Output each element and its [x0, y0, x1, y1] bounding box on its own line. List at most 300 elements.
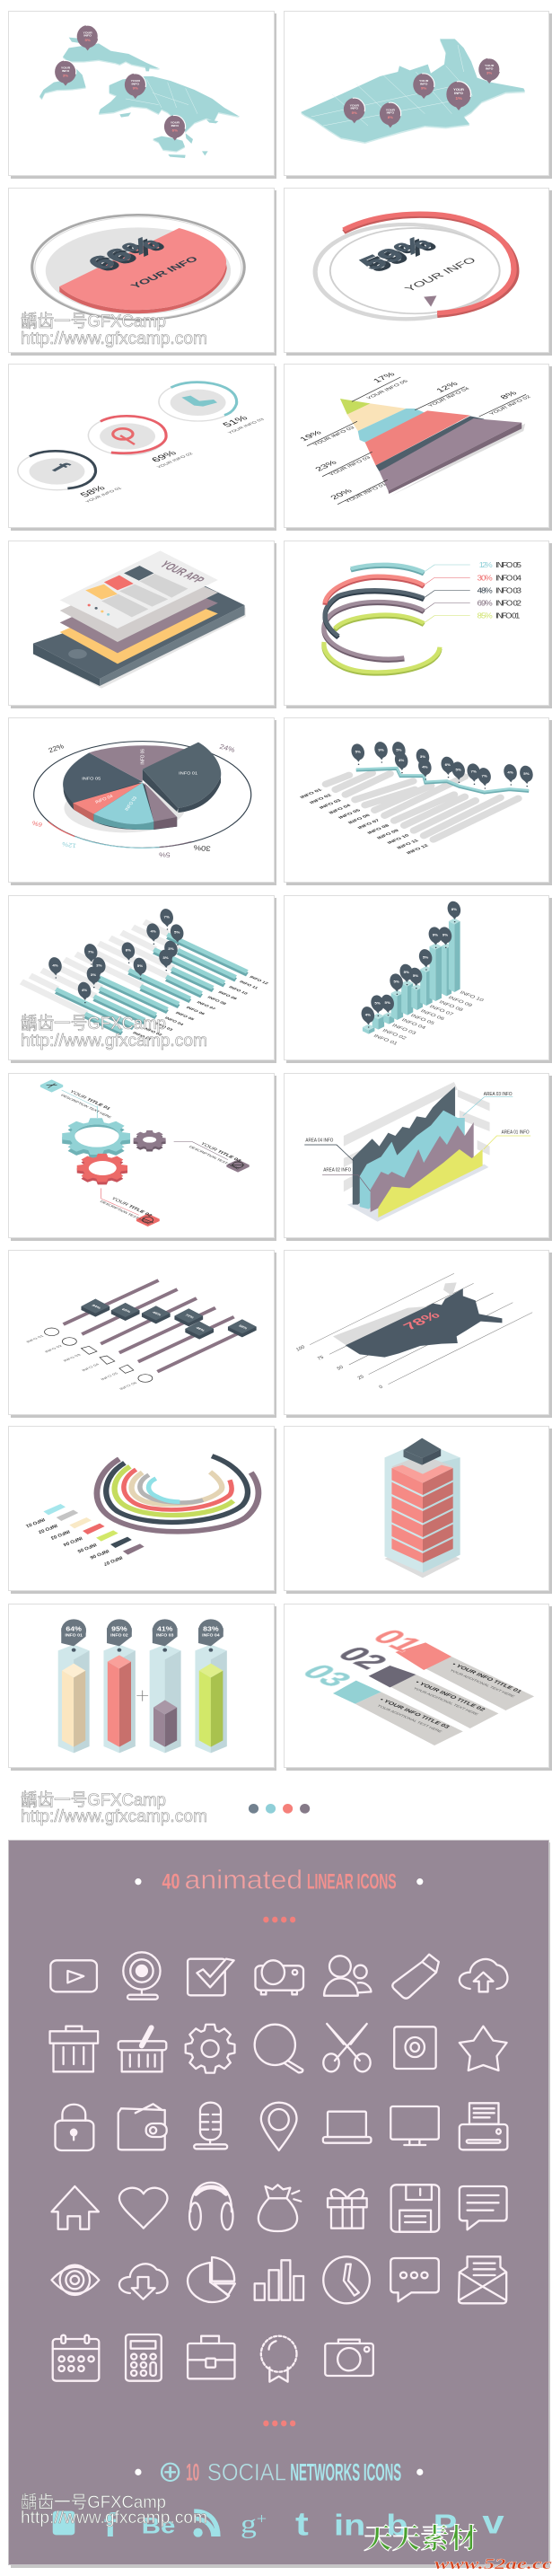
- facebook ring: [18, 451, 123, 504]
- ring legend: INFO 01: [25, 1517, 46, 1528]
- ring legend: INFO 06: [89, 1548, 110, 1560]
- panel: stacked arcs: [284, 541, 552, 708]
- slider knobs: [81, 1299, 257, 1340]
- watermark 4: 龋齿一号GFXCamp: [21, 2492, 166, 2512]
- scale labels: 100: [295, 1345, 306, 1353]
- panel: stacked arcs: INFO 05: [495, 561, 521, 569]
- world map land: [39, 38, 240, 158]
- panel: pyramid: 8%: [499, 390, 519, 400]
- heading: 40 animated linear icons: LINEAR ICONS: [307, 1869, 397, 1894]
- info labels: INFO 03: [153, 1022, 174, 1032]
- panel: 66 percent disc: [9, 189, 276, 356]
- tube 1: [58, 1619, 90, 1753]
- map fill: [346, 1288, 502, 1358]
- panel: pyramid: [284, 365, 552, 531]
- tube 3: INFO 03: [156, 1633, 174, 1638]
- tube 1: INFO 01: [65, 1633, 83, 1638]
- info labels: INFO 07: [357, 819, 381, 830]
- watermark 3: http://www.gfxcamp.com: [21, 1807, 207, 1826]
- panel: numbered strips: [284, 1604, 552, 1771]
- map pins: 6%: [172, 128, 178, 132]
- facebook ring: f: [45, 459, 75, 475]
- lime arc: [324, 615, 440, 674]
- value pins: 5%: [374, 1001, 381, 1006]
- panel: gears: DESCRIPTION TEXT HERE: [60, 1094, 113, 1119]
- panel: stacked area chart: [284, 1074, 552, 1241]
- info labels: INFO 03: [319, 799, 343, 810]
- twitter ring: YOUR INFO 03: [227, 418, 266, 435]
- value pins: 4%: [365, 1013, 371, 1016]
- watermark 1: http://www.gfxcamp.com: [21, 329, 207, 348]
- scale lines: [310, 1273, 532, 1385]
- watermark 2: [21, 1014, 207, 1051]
- panel: line over grey bars: [284, 718, 552, 885]
- map pins: INFO: [171, 124, 180, 127]
- tube 4: INFO 04: [202, 1633, 220, 1638]
- map pins: 5%: [84, 38, 91, 42]
- twitter ring: [159, 382, 266, 435]
- heading: 10 social networks icons: SOCIAL: [207, 2459, 286, 2486]
- panel: gears: YOUR TITLE 01: [68, 1090, 111, 1111]
- map pins: [344, 58, 500, 127]
- strip 03: • YOUR INFO TITLE 03: [378, 1698, 451, 1729]
- teal line: [356, 769, 529, 793]
- value pins: 3%: [91, 972, 97, 977]
- strip 01: [364, 1625, 534, 1710]
- panel: stacked arcs: 85%: [478, 611, 493, 620]
- watermark 4: http://www.gfxcamp.com: [21, 2508, 207, 2528]
- battery cap: [404, 1438, 441, 1465]
- value 59%: 59%: [358, 234, 443, 276]
- pie labels: 22%: [48, 743, 66, 754]
- columns: [363, 919, 460, 1034]
- tube 4: [195, 1619, 227, 1753]
- social icons: [53, 2504, 504, 2544]
- USA map land: [301, 39, 525, 144]
- panel: stacked arcs: 48%: [478, 586, 493, 594]
- scale labels: [295, 1345, 384, 1390]
- social icons: v: [482, 2504, 504, 2541]
- teal bars shadow: [56, 937, 247, 1033]
- outer ring: [34, 742, 251, 848]
- heading: 10 social networks icons: 10: [186, 2459, 199, 2486]
- scale labels: 25: [357, 1375, 365, 1381]
- info labels: INFO 05: [409, 1014, 436, 1026]
- value pins: 3%: [162, 955, 169, 960]
- info labels: INFO 02: [381, 1028, 407, 1041]
- teal bars: [56, 935, 247, 1031]
- slider icons: [45, 1328, 153, 1382]
- pie labels: [31, 743, 236, 858]
- label your info: YOUR INFO: [402, 256, 478, 293]
- info labels: INFO 08: [438, 1000, 464, 1013]
- info labels: INFO 06: [419, 1009, 446, 1022]
- panel: stacked area chart: AREA 04 INFO: [305, 1138, 333, 1143]
- map pins: 3%: [486, 71, 493, 75]
- tube 2: [103, 1619, 136, 1753]
- info labels: INFO 06: [347, 813, 372, 825]
- heading: 40 animated linear icons: animated: [185, 1864, 302, 1895]
- pie labels: 30%: [193, 843, 211, 853]
- value pins: 5%: [137, 963, 144, 968]
- pie labels: 12%: [61, 840, 77, 849]
- social icons: g: [241, 2510, 257, 2539]
- tube 1: 64%: [66, 1625, 82, 1632]
- triangle marker: [424, 295, 436, 307]
- pie slices: [63, 743, 221, 830]
- ring legend: INFO 05: [76, 1542, 97, 1553]
- info labels: INFO 04: [329, 804, 353, 815]
- map pins: INFO: [420, 83, 428, 85]
- watermark 1: 龋齿一号GFXCamp: [21, 312, 166, 331]
- ring legend: INFO 03: [49, 1528, 70, 1540]
- red gear: [77, 1154, 127, 1184]
- map pins: 1%: [455, 96, 462, 101]
- value pins: 7%: [164, 915, 170, 919]
- social icons: in: [334, 2508, 365, 2542]
- panel: stacked arcs: 69%: [478, 599, 493, 607]
- app screen blocks: [85, 566, 188, 617]
- pie labels: INFO 05: [82, 777, 101, 781]
- map pins: INFO: [62, 69, 70, 73]
- scale labels: 50: [337, 1365, 345, 1372]
- map pins: INFO: [486, 67, 494, 70]
- panel: stacked arcs: INFO 01: [495, 611, 520, 620]
- strip 03: [294, 1660, 463, 1745]
- info labels: INFO 09: [376, 829, 400, 840]
- ring legend: INFO 04: [61, 1535, 83, 1547]
- social icons: Be: [142, 2513, 175, 2538]
- pie labels: INFO 06: [140, 749, 146, 765]
- value pins: 3%: [168, 946, 174, 951]
- pie labels: 6%: [31, 819, 43, 829]
- value pins: 5%: [413, 973, 419, 978]
- panel: stacked arcs: 30%: [478, 574, 493, 582]
- social icons: P: [434, 2508, 457, 2542]
- slider labels: INFO 02: [44, 1344, 64, 1353]
- separator dots: [263, 2421, 295, 2426]
- slider knobs: 84%: [91, 1304, 102, 1309]
- map pins: INFO: [351, 107, 359, 110]
- map pins: YOUR: [485, 64, 495, 67]
- slider tracks: [64, 1280, 253, 1372]
- value pins: 5%: [455, 768, 461, 772]
- watermark 4: [21, 2492, 207, 2528]
- strip 03: YOUR ADDITIONAL TEXT HERE: [376, 1704, 443, 1733]
- value pins: 5%: [396, 748, 402, 752]
- pyramid labels: [307, 377, 526, 505]
- ring legend: INFO 02: [37, 1523, 58, 1534]
- pie labels: INFO 01: [179, 771, 197, 776]
- info labels: INFO 08: [206, 996, 227, 1006]
- tube 3: 41%: [157, 1625, 172, 1632]
- strip 02: 02: [329, 1642, 397, 1674]
- dark arc: [325, 590, 424, 637]
- info labels: INFO 07: [428, 1005, 455, 1017]
- value 59%: 59%: [354, 233, 439, 274]
- value pins: 4%: [52, 963, 58, 967]
- panel: USA map: [284, 11, 552, 179]
- info labels: INFO 10: [227, 986, 249, 996]
- teal arc: [351, 565, 424, 574]
- value pins: 4%: [82, 988, 88, 992]
- slider knobs: 72%: [184, 1314, 196, 1319]
- value pins: 9%: [433, 933, 438, 937]
- pinterest ring: YOUR INFO 02: [156, 453, 195, 470]
- map pins: YOUR: [350, 104, 360, 107]
- info labels: INFO 10: [459, 990, 485, 1003]
- slider labels: INFO 05: [100, 1372, 119, 1381]
- panel: pyramid: 23%: [313, 460, 339, 472]
- watermark 2: http://www.gfxcamp.com: [21, 1031, 207, 1051]
- facebook ring: YOUR INFO 01: [84, 487, 123, 504]
- map pins: 8%: [388, 115, 393, 119]
- panel: battery tower: [284, 1426, 552, 1594]
- social icons: Tube: [53, 2525, 74, 2534]
- watermark: site logo: [364, 2516, 552, 2572]
- panel: stacked arcs: INFO 03: [495, 586, 521, 594]
- heading: 40 animated linear icons: [135, 1864, 423, 1922]
- info labels: [131, 975, 269, 1042]
- value pins: [48, 908, 185, 1003]
- pinterest ring: 69%: [150, 450, 179, 463]
- value pins: 9%: [378, 748, 384, 752]
- purple gear: [134, 1130, 166, 1152]
- your app title: YOUR APP: [157, 559, 207, 585]
- tube 4: 83%: [203, 1625, 219, 1632]
- panel: pyramid: YOUR INFO 02: [488, 394, 533, 416]
- slider knobs: 65%: [121, 1307, 132, 1314]
- panel: gears: DESCRIPTION TEXT HERE: [188, 1145, 241, 1170]
- strip 01: YOUR ADDITIONAL TEXT HERE: [449, 1669, 516, 1698]
- info labels: INFO 12: [406, 844, 430, 855]
- panel: exploded pie chart: [9, 718, 276, 885]
- watermark 3: [21, 1790, 207, 1826]
- slider labels: INFO 06: [118, 1381, 138, 1390]
- slider knobs: 46%: [152, 1311, 162, 1316]
- info labels: [372, 990, 485, 1046]
- heading: 40 animated linear icons: 40: [162, 1869, 180, 1894]
- map pins: INFO: [83, 34, 92, 38]
- hexagon icons: [40, 1079, 250, 1226]
- panel: gears: YOUR TITLE 03: [199, 1142, 242, 1163]
- icon row 1: [50, 1952, 507, 2000]
- info labels: INFO 01: [131, 1032, 153, 1042]
- map pins: INFO: [454, 92, 463, 95]
- info labels: INFO 09: [447, 996, 474, 1008]
- info labels: INFO 01: [300, 788, 324, 799]
- map pins: YOUR: [131, 79, 141, 83]
- icon row 4: [52, 2183, 507, 2232]
- map pins: 3%: [63, 74, 69, 77]
- scale labels: 0: [379, 1385, 384, 1390]
- grey bars: [326, 773, 518, 840]
- value pins: 5%: [523, 771, 530, 776]
- panel: icons showcase: [9, 1841, 550, 2568]
- map pins: YOUR: [453, 88, 464, 92]
- panel: stacked arcs: 12%: [479, 561, 493, 569]
- panel: pyramid: YOUR INFO 01: [344, 482, 389, 504]
- watermark 1: [21, 312, 207, 348]
- info labels: INFO 08: [367, 823, 391, 835]
- value pins: 5%: [174, 930, 180, 935]
- value pins: 7%: [481, 774, 487, 778]
- map pins: INFO: [132, 83, 139, 85]
- value pins: 4%: [507, 770, 513, 774]
- red stacked blocks: [391, 1465, 453, 1563]
- panel: pyramid: YOUR INFO 03: [328, 455, 372, 477]
- info labels: INFO 05: [337, 808, 363, 820]
- strip 03: 03: [294, 1660, 362, 1691]
- panel: social rings: [9, 365, 276, 531]
- watermark: site logo: 天天素材: [364, 2516, 478, 2556]
- panel: gears: YOUR TITLE 02: [110, 1197, 153, 1218]
- map pins: YOUR: [386, 109, 396, 111]
- pie labels: 24%: [218, 743, 236, 754]
- back panels: [344, 1082, 490, 1191]
- panel: pyramid: 17%: [372, 371, 398, 384]
- area labels: [304, 1097, 530, 1191]
- purple arc: [324, 602, 424, 661]
- map pins: YOUR: [61, 66, 71, 70]
- panel: stacked area chart: AREA 01 INFO: [502, 1130, 530, 1135]
- info labels: INFO 10: [387, 834, 411, 845]
- icon row 5: [52, 2256, 506, 2303]
- map pins: YOUR: [419, 79, 429, 83]
- value pins: 6%: [445, 762, 451, 767]
- panel: stacked area chart: AREA 03 INFO: [484, 1091, 513, 1097]
- panel: isometric horizontal bars: [9, 896, 276, 1063]
- social icons: t: [295, 2505, 309, 2543]
- panel: world map: [9, 11, 276, 179]
- icon row 2: [50, 2024, 507, 2073]
- map pins: YOUR: [83, 31, 92, 34]
- plus sign: [136, 1691, 148, 1701]
- value pins: 3%: [420, 754, 426, 759]
- info labels: INFO 01: [372, 1033, 399, 1046]
- info labels: INFO 04: [163, 1016, 185, 1026]
- info labels: INFO 07: [196, 1001, 216, 1011]
- panel: sliders: [9, 1250, 276, 1418]
- value pins: 6%: [126, 948, 131, 953]
- map pins: 9%: [133, 86, 138, 91]
- ring legend: INFO 07: [102, 1554, 123, 1566]
- gear labels: [62, 1090, 228, 1215]
- info labels: INFO 12: [248, 975, 269, 986]
- info labels: INFO 11: [396, 839, 421, 850]
- label your info: YOUR INFO: [128, 255, 201, 290]
- panel: layered phone: [9, 541, 276, 708]
- value pins: 4%: [150, 929, 156, 934]
- panel: 59 percent ring: [284, 189, 552, 356]
- panel: concentric rings: [9, 1426, 276, 1594]
- value pins: 9%: [442, 933, 449, 937]
- value pins: 5%: [355, 750, 361, 754]
- panel: pyramid: 12%: [434, 381, 460, 394]
- icon row 6: [53, 2334, 373, 2382]
- value pins: 7%: [471, 769, 477, 774]
- value 66%: 66%: [82, 233, 167, 274]
- value pins: 5%: [404, 970, 409, 974]
- ring legend: [25, 1504, 145, 1566]
- arc labels: [424, 565, 470, 623]
- value pins: 5%: [385, 1000, 390, 1005]
- info labels: INFO 05: [174, 1011, 196, 1022]
- panel: dark USA map: [284, 1250, 552, 1418]
- watermark 2: 龋齿一号GFXCamp: [21, 1014, 166, 1033]
- info labels: INFO 03: [390, 1024, 417, 1036]
- map pins: [55, 25, 186, 141]
- map pins: INFO: [387, 111, 395, 115]
- info labels: INFO 02: [309, 794, 333, 804]
- watermark 3: 龋齿一号GFXCamp: [21, 1790, 166, 1810]
- tube 2: INFO 02: [110, 1633, 128, 1638]
- map pins: 5%: [352, 110, 357, 115]
- panel: pyramid: 20%: [329, 488, 355, 501]
- slider labels: [25, 1334, 138, 1390]
- slider labels: INFO 04: [81, 1363, 101, 1372]
- value pins: 5%: [423, 955, 429, 959]
- slider knobs: 46%: [195, 1326, 206, 1332]
- value pins: 8%: [451, 907, 457, 911]
- map pins: 9%: [421, 86, 427, 91]
- value pins: 4%: [422, 765, 428, 769]
- panel: isometric columns: [284, 896, 552, 1063]
- panel: gears: [9, 1074, 276, 1241]
- panel: pyramid: YOUR INFO 05: [365, 379, 410, 400]
- value pins: [350, 741, 534, 789]
- watermark: site logo: www.52ae.cc: [434, 2555, 552, 2572]
- info labels: INFO 02: [142, 1027, 163, 1037]
- panel: test tube bars: [9, 1604, 276, 1771]
- grey stripes: [22, 922, 180, 1014]
- pie labels: INFO 04: [94, 794, 114, 805]
- strip 02: [329, 1642, 498, 1728]
- rings: [97, 1456, 258, 1532]
- value 66%: 66%: [86, 234, 171, 276]
- strip 02: • YOUR INFO TITLE 02: [414, 1680, 486, 1712]
- facebook ring: 58%: [79, 485, 108, 498]
- twitter ring: 51%: [221, 415, 250, 428]
- slider labels: INFO 03: [62, 1353, 82, 1362]
- pie labels: 5%: [159, 851, 171, 858]
- panel: stacked arcs: INFO 02: [495, 599, 521, 607]
- slider knobs: 58%: [238, 1324, 249, 1330]
- slider labels: INFO 01: [25, 1334, 45, 1343]
- info labels: INFO 09: [217, 990, 238, 1001]
- social icons: f: [104, 2507, 118, 2544]
- scale labels: 75: [317, 1355, 325, 1362]
- value pins: [360, 901, 462, 1028]
- value pins: 3%: [96, 963, 102, 967]
- value pins: 5%: [393, 980, 399, 984]
- heading: 10 social networks icons: NETWORKS ICONS: [290, 2459, 401, 2486]
- info labels: INFO 06: [185, 1006, 206, 1016]
- strip 02: YOUR ADDITIONAL TEXT HERE: [413, 1687, 479, 1716]
- pie labels: INFO 03: [124, 796, 138, 812]
- tube 2: 95%: [111, 1625, 127, 1632]
- social icons: +: [257, 2510, 267, 2527]
- panel: pyramid: YOUR INFO 04: [427, 386, 471, 408]
- panel: dark USA map: 78%: [400, 1309, 443, 1332]
- strip 01: 01: [364, 1625, 432, 1656]
- info labels: [300, 788, 430, 855]
- social icons: b: [386, 2508, 408, 2542]
- teal gear: [62, 1106, 130, 1158]
- info labels: INFO 11: [238, 980, 259, 990]
- value pins: 7%: [88, 950, 94, 954]
- tube 3: [150, 1619, 181, 1753]
